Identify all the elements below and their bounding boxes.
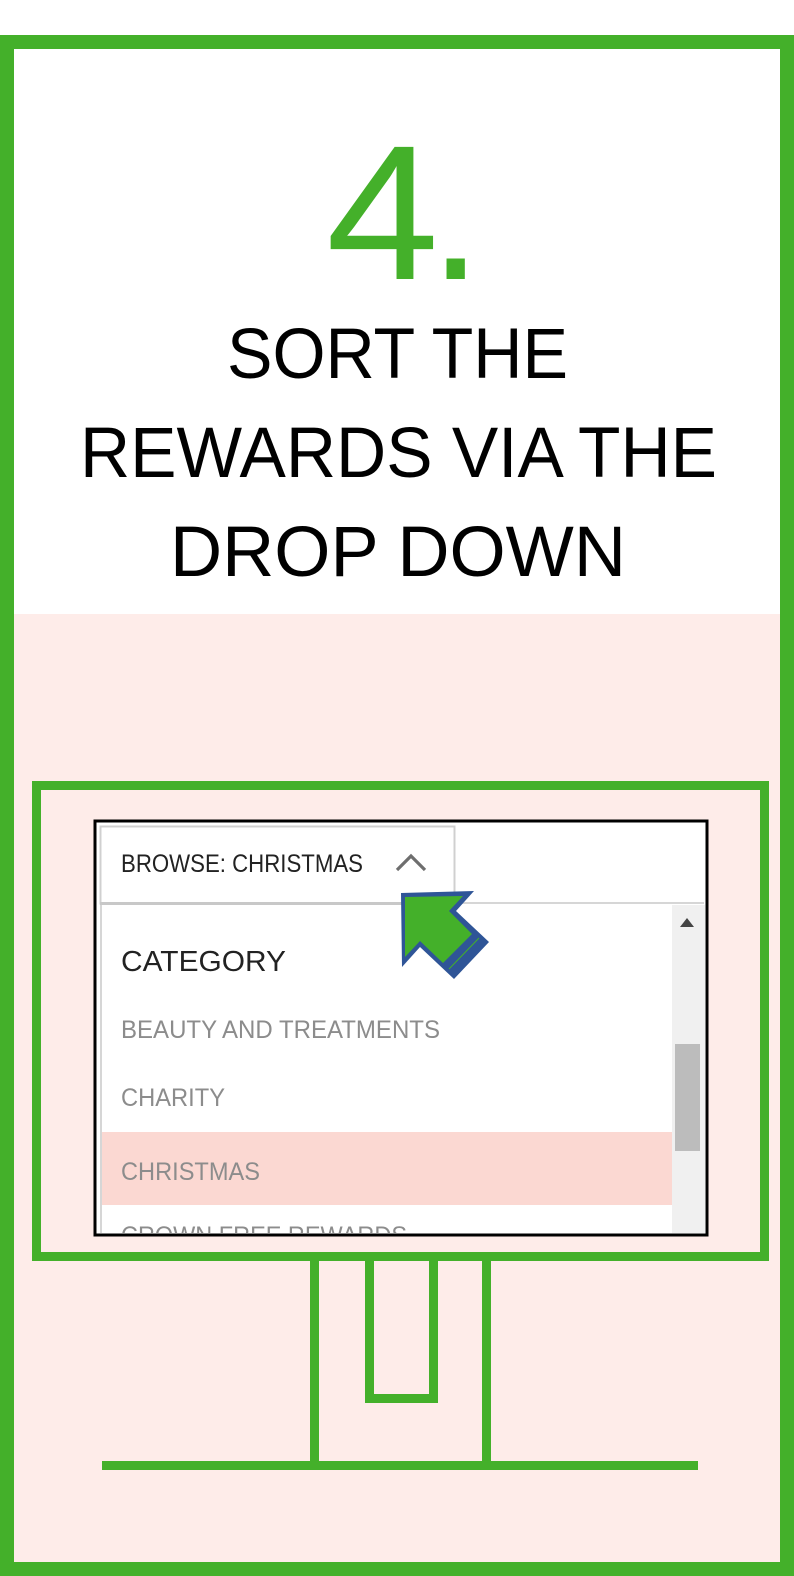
step number: 4 — [326, 105, 439, 320]
menu item: charity: CHARITY — [121, 1084, 225, 1112]
monitor stand outer — [314, 1256, 486, 1465]
browse button — [100, 826, 454, 904]
scrollbar thumb — [675, 1044, 700, 1151]
heading line 2: REWARDS VIA THE — [80, 414, 717, 493]
icon: scroll up arrow — [680, 918, 694, 927]
icon: computer monitor — [36, 786, 764, 1466]
list left edge — [100, 904, 102, 1234]
scrollbar track — [672, 905, 705, 1234]
browse label: BROWSE: CHRISTMAS — [121, 850, 363, 878]
arrow green fill — [405, 896, 472, 963]
arrow blue outline — [401, 891, 489, 979]
browse button bottom edge — [100, 902, 402, 905]
screenshot background — [95, 821, 707, 1235]
step number: . — [429, 105, 482, 320]
arrow highlight line — [449, 938, 479, 969]
heading line 1: SORT THE — [227, 315, 568, 394]
step number — [326, 105, 482, 320]
menu item: crown free rewards: CROWN FREE REWARDS — [121, 1222, 407, 1250]
menu item: christmas: CHRISTMAS — [121, 1158, 260, 1186]
monitor base — [102, 1461, 698, 1470]
heading — [80, 315, 717, 592]
icon: chevron up — [397, 856, 425, 870]
category heading: CATEGORY — [121, 946, 286, 978]
selected row highlight — [102, 1132, 672, 1205]
screenshot: rewards drop down — [95, 821, 707, 1250]
panel: pink lower background — [14, 614, 780, 1562]
icon: pointer arrow — [401, 891, 489, 979]
heading line 3: DROP DOWN — [170, 513, 626, 592]
monitor stand inner slot — [370, 1256, 434, 1398]
monitor screen frame — [36, 786, 764, 1256]
dropdown contents — [100, 826, 705, 1250]
menu item: beauty: BEAUTY AND TREATMENTS — [121, 1016, 440, 1044]
header divider — [454, 902, 704, 904]
